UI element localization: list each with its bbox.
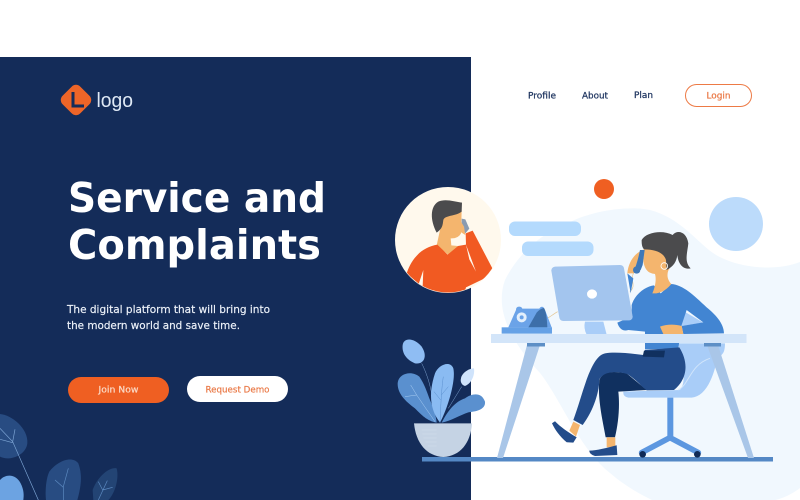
leaf: middle bbox=[46, 460, 81, 500]
title bbox=[68, 174, 326, 269]
neck and face bbox=[643, 247, 671, 293]
icon: logo diamond bbox=[58, 82, 94, 118]
logo bbox=[58, 82, 133, 118]
laptop screen bbox=[551, 265, 633, 321]
arm holding handset bbox=[627, 249, 644, 273]
plant bbox=[398, 340, 485, 457]
desk left leg bbox=[497, 345, 540, 458]
man figure bbox=[407, 200, 495, 295]
floor line bbox=[422, 457, 773, 462]
subtitle text: the modern world and save time. bbox=[67, 320, 240, 332]
login button: Login bbox=[706, 92, 730, 102]
phone dial bbox=[517, 312, 527, 322]
desk right leg bbox=[707, 345, 754, 458]
background blob bbox=[502, 208, 800, 500]
subtitle text: The digital platform that will bring into bbox=[66, 304, 270, 316]
nav link: Plan: Plan bbox=[634, 91, 653, 101]
far shoe bbox=[589, 445, 617, 456]
button: Join Now bbox=[68, 377, 169, 403]
far ankle bbox=[607, 437, 615, 447]
leaf: top bbox=[403, 340, 425, 364]
hand bbox=[461, 222, 466, 235]
laptop bbox=[551, 265, 633, 335]
phone handset shade bbox=[528, 308, 547, 327]
logo wordmark: logo bbox=[96, 90, 133, 112]
phone bbox=[462, 219, 469, 233]
decorative leaves bottom left bbox=[0, 414, 117, 500]
chair bbox=[623, 343, 725, 458]
far leg bbox=[599, 372, 647, 437]
phone base bbox=[502, 327, 552, 334]
leaf: small bbox=[461, 368, 474, 386]
pot bbox=[414, 423, 472, 457]
handset bbox=[633, 250, 645, 274]
earring bbox=[661, 263, 668, 269]
nav link: Profile: Profile bbox=[528, 92, 556, 102]
nav link: About: About bbox=[582, 92, 608, 102]
sweater bbox=[617, 284, 724, 349]
sleeve cuff bbox=[627, 273, 633, 293]
button: Join Now: Join Now bbox=[97, 386, 139, 396]
orange dot bbox=[594, 179, 614, 199]
desk top bbox=[491, 334, 746, 343]
laptop stand bbox=[584, 322, 607, 335]
panel: navy background bbox=[0, 57, 471, 500]
title: Service and bbox=[68, 174, 326, 222]
laptop dot bbox=[587, 289, 597, 299]
sweater arm gaps bbox=[418, 245, 476, 287]
blue circle bbox=[709, 197, 763, 251]
subtitle text bbox=[66, 304, 270, 332]
title: Complaints bbox=[68, 221, 321, 269]
man on phone in circle bbox=[395, 187, 501, 295]
leaf: top left bbox=[0, 414, 38, 500]
waist pocket shade bbox=[643, 351, 665, 357]
hand on desk bbox=[660, 325, 683, 334]
desk brackets bbox=[527, 343, 545, 346]
phone cord bbox=[630, 273, 633, 292]
phone cord bbox=[540, 312, 558, 322]
phone body bbox=[508, 307, 552, 327]
button: Request Demo: Request Demo bbox=[206, 386, 270, 396]
hair bbox=[642, 232, 691, 270]
face and neck bbox=[437, 211, 462, 255]
leaf: right bbox=[442, 394, 485, 423]
leaf: right bbox=[93, 468, 117, 500]
desk bbox=[491, 334, 754, 458]
desk and chair with woman bbox=[551, 232, 725, 458]
chair wheels bbox=[639, 451, 646, 458]
navigation bbox=[528, 91, 653, 102]
stems bbox=[422, 363, 462, 410]
leaf: bottom left bbox=[0, 476, 24, 500]
speech bubbles bbox=[509, 222, 594, 256]
leaf: centre bbox=[431, 364, 454, 423]
icon: logo letter L bbox=[73, 92, 84, 106]
gap behind arm bbox=[682, 310, 703, 326]
login button bbox=[686, 84, 752, 106]
chair stem bbox=[667, 398, 673, 436]
near shoe bbox=[552, 421, 577, 443]
chair back bbox=[623, 343, 725, 398]
sweater bbox=[407, 231, 495, 295]
circle backdrop bbox=[395, 187, 501, 293]
button: Request Demo bbox=[187, 376, 288, 402]
near ankle bbox=[569, 422, 580, 437]
chair base bbox=[642, 438, 698, 453]
leaf: left bbox=[398, 373, 437, 423]
pants bbox=[573, 347, 686, 425]
desk telephone bbox=[502, 307, 558, 334]
hair bbox=[432, 200, 462, 233]
